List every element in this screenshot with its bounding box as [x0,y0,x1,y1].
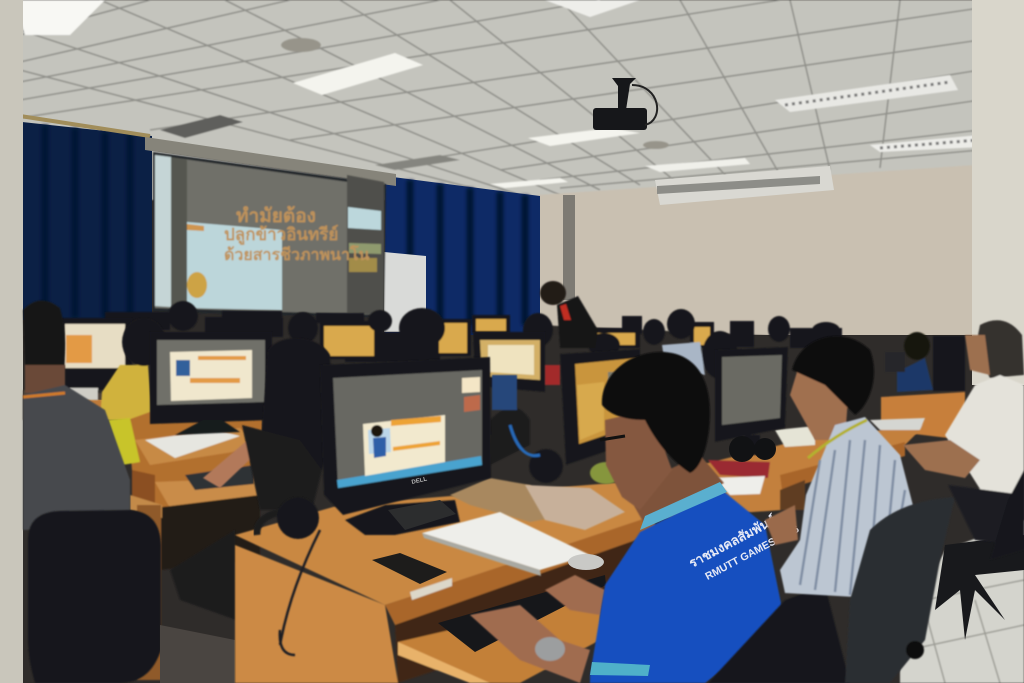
monitor 1 far left [60,318,132,400]
chair, foreground left [28,510,161,683]
projector valance [145,137,396,186]
middle curtain [385,176,540,335]
room base shadow [23,335,973,683]
back wall [538,165,975,345]
man in grey, foreground left [23,300,130,530]
rear desk right [881,392,965,440]
left desk [108,412,262,680]
person in yellow [100,318,166,420]
beige cloth [450,478,567,522]
screen text [224,205,370,264]
black jacket on chair [708,585,850,683]
screen text: ด้วยสารชีวภาพนาโน [224,244,370,264]
chair far right base [935,535,1024,640]
shirt text: ราชมงคลสัมพันธ์ [686,512,779,571]
shirt text [686,505,801,587]
left curtain [22,122,152,320]
foreground monitor [320,357,491,515]
man in striped shirt [765,336,918,597]
screen text: ปลูกข้าวอินทรีย์ [224,224,338,246]
floor right [900,520,1024,683]
projection screen [153,152,386,318]
instructor [540,281,598,348]
phone [372,553,447,584]
papers on main desk [422,512,590,576]
blue shirt [590,482,801,683]
right pillar [972,0,1024,385]
screen text: ทำมัยต้อง [236,205,316,227]
mid room: back row [23,281,965,440]
monitor 2 [150,332,272,435]
headphones on right desk [729,436,776,462]
headset on main desk [257,497,320,655]
keyboard [438,575,606,652]
back row monitors [105,311,842,362]
left pillar [0,0,23,683]
hard drive [388,500,456,530]
ceiling lights [15,0,980,188]
monitor on right of main desk [560,349,640,465]
right desk [640,418,925,520]
monitor, right row [715,347,788,455]
curtain folds [45,125,525,325]
headphones middle [490,365,622,484]
woman in black [170,338,334,620]
air conditioner [655,166,834,205]
cornice [20,116,150,136]
monitor stand [345,500,460,535]
clear folder [525,485,625,530]
air vents [160,38,669,170]
projector [593,78,657,130]
shirt text: RMUTT GAMES 2016 [703,523,801,583]
floor left [160,625,235,683]
whiteboard [384,252,426,332]
monitor rear centre [473,332,545,392]
ceiling [0,0,1024,200]
office chair right [845,497,955,683]
left man's desk strip [70,398,105,412]
monitor brand: DELL [411,477,428,486]
arm and hand [470,575,605,683]
student far right [885,332,965,392]
student glasses [600,436,625,440]
wall post [563,195,575,300]
main student [602,352,724,525]
man in white shirt [903,320,1024,560]
main desk [235,480,655,683]
mouse [568,554,604,570]
back row people [168,301,840,379]
